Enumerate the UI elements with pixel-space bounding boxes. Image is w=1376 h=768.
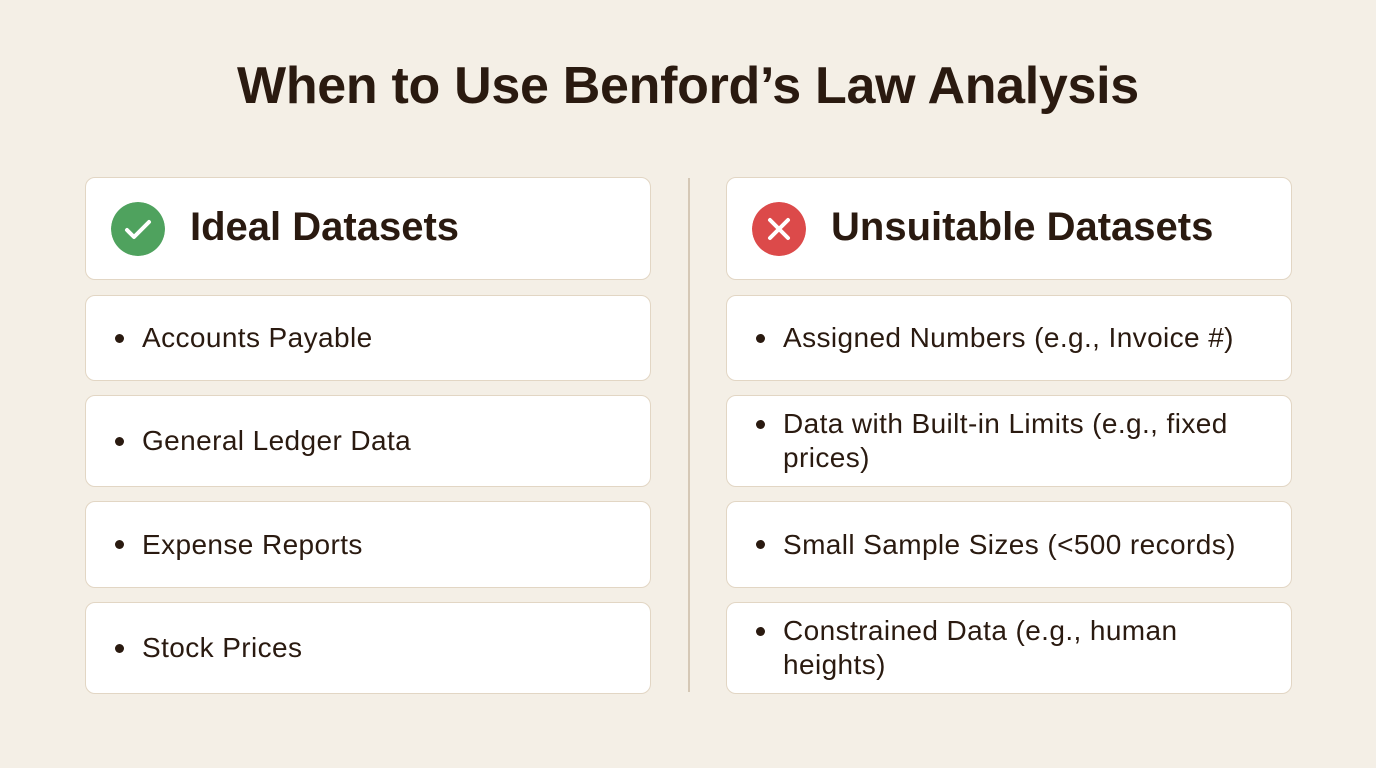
heading: ideal <box>85 177 651 280</box>
item <box>726 395 1292 487</box>
item: Stock Prices <box>142 632 302 663</box>
heading: unsuitable <box>726 177 1292 280</box>
item <box>85 295 651 381</box>
item <box>726 602 1292 694</box>
item: Expense Reports <box>142 528 363 560</box>
panel: unsuitable datasets <box>726 177 1292 694</box>
panel: ideal datasets <box>85 177 651 694</box>
item <box>726 501 1292 588</box>
item: Accounts Payable <box>142 322 373 353</box>
icon: check <box>111 202 165 256</box>
icon: cross <box>752 202 806 256</box>
item: Constrained Data (e.g., human <box>783 615 1177 646</box>
title: When to Use Benford’s Law Analysis <box>237 57 1139 115</box>
item <box>726 295 1292 381</box>
item <box>85 395 651 487</box>
item <box>85 602 651 694</box>
item: heights) <box>783 649 886 680</box>
item: General Ledger Data <box>142 425 411 456</box>
divider <box>688 178 690 692</box>
item: Data with Built-in Limits (e.g., fixed <box>783 408 1228 439</box>
item: Small Sample Sizes (<500 records) <box>783 528 1236 560</box>
item: Assigned Numbers (e.g., Invoice #) <box>783 322 1234 353</box>
heading: unsuitable: Unsuitable Datasets <box>831 205 1213 249</box>
item: prices) <box>783 442 870 473</box>
heading: ideal: Ideal Datasets <box>190 205 459 249</box>
item <box>85 501 651 588</box>
